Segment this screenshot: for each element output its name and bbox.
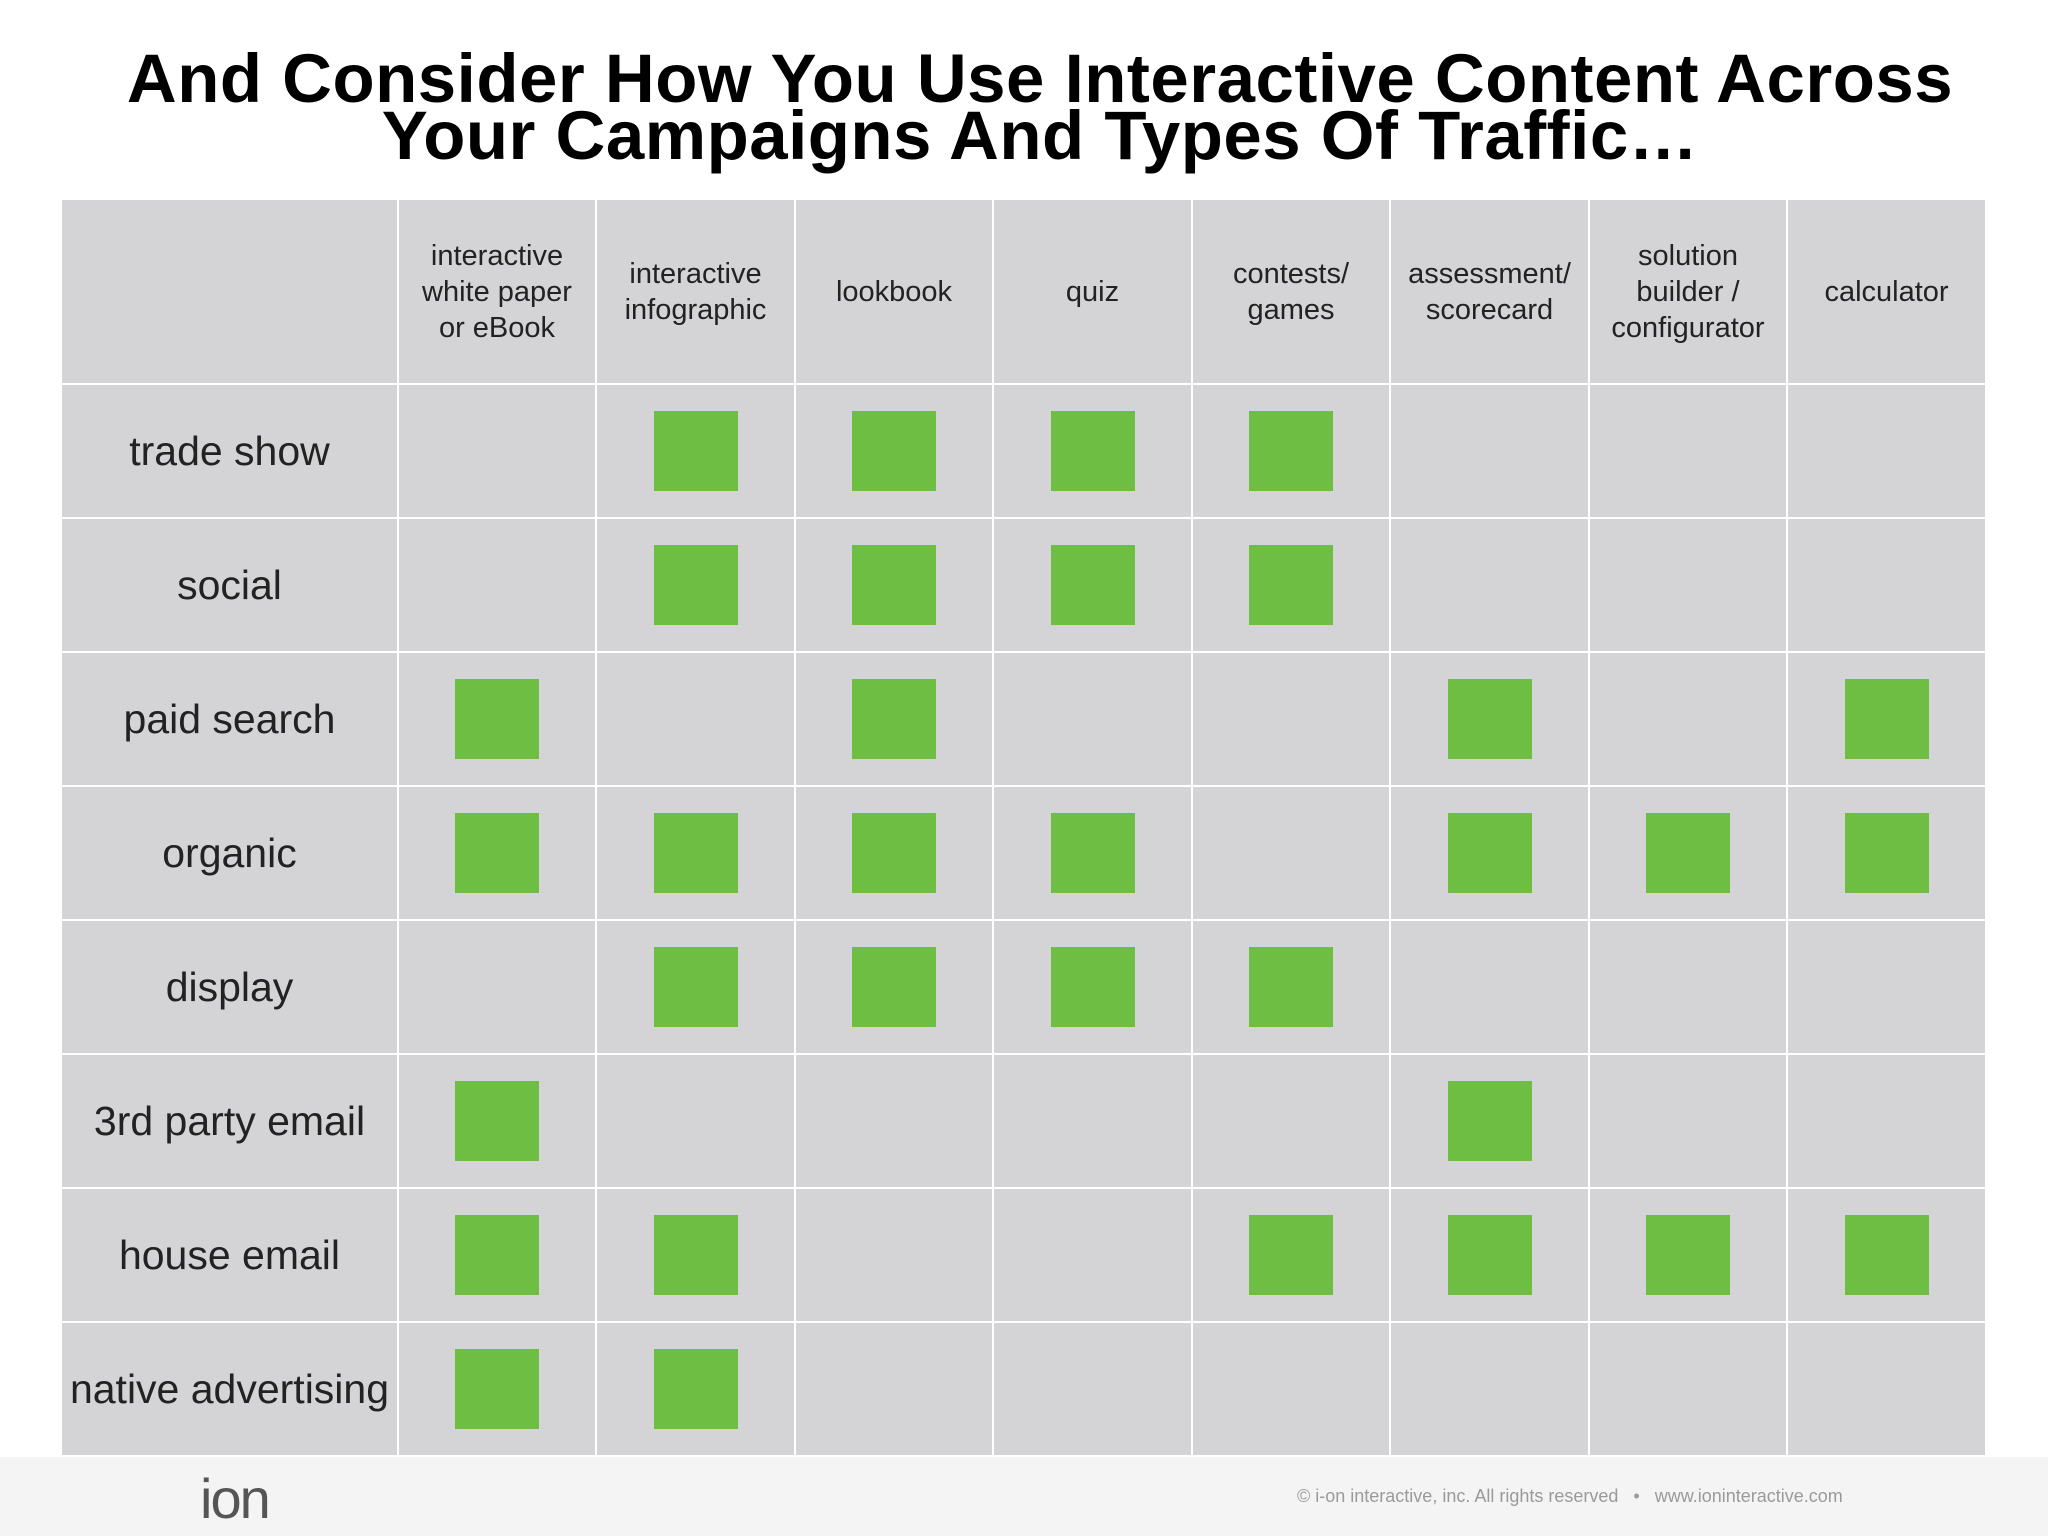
matrix table: quiz bbox=[1066, 276, 1119, 308]
matrix table: trade show bbox=[129, 428, 330, 474]
matrix table: scorecard bbox=[1426, 294, 1553, 326]
matrix table: white paper bbox=[422, 276, 572, 308]
matrix table: assessment/ bbox=[1408, 258, 1571, 290]
matrix table: or eBook bbox=[439, 312, 555, 344]
matrix table: interactive bbox=[431, 240, 563, 272]
matrix table: social bbox=[177, 562, 282, 608]
matrix table: solution bbox=[1638, 240, 1738, 272]
matrix table bbox=[62, 200, 1985, 1455]
matrix table: builder / bbox=[1636, 276, 1740, 308]
title: And Consider How You Use Interactive Content Across bbox=[127, 40, 1953, 117]
matrix table: games bbox=[1247, 294, 1335, 326]
title bbox=[127, 40, 1953, 174]
matrix table: contests/ bbox=[1233, 258, 1349, 290]
title: Your Campaigns And Types Of Traffic… bbox=[382, 97, 1698, 174]
matrix table: organic bbox=[162, 830, 297, 876]
logo: ion bbox=[200, 1467, 269, 1530]
matrix table: house email bbox=[119, 1232, 340, 1278]
matrix table: configurator bbox=[1611, 312, 1765, 344]
matrix table: infographic bbox=[625, 294, 766, 326]
matrix table: display bbox=[166, 964, 293, 1010]
matrix table: calculator bbox=[1824, 276, 1949, 308]
matrix table: 3rd party email bbox=[94, 1098, 365, 1144]
matrix table: lookbook bbox=[836, 276, 952, 308]
footer bar bbox=[0, 1457, 2048, 1536]
matrix table: paid search bbox=[124, 696, 335, 742]
copyright: © i-on interactive, inc. All rights reserved • www.ioninteractive.com bbox=[1297, 1486, 1843, 1506]
matrix table: native advertising bbox=[70, 1366, 389, 1412]
matrix table: interactive bbox=[629, 258, 762, 290]
